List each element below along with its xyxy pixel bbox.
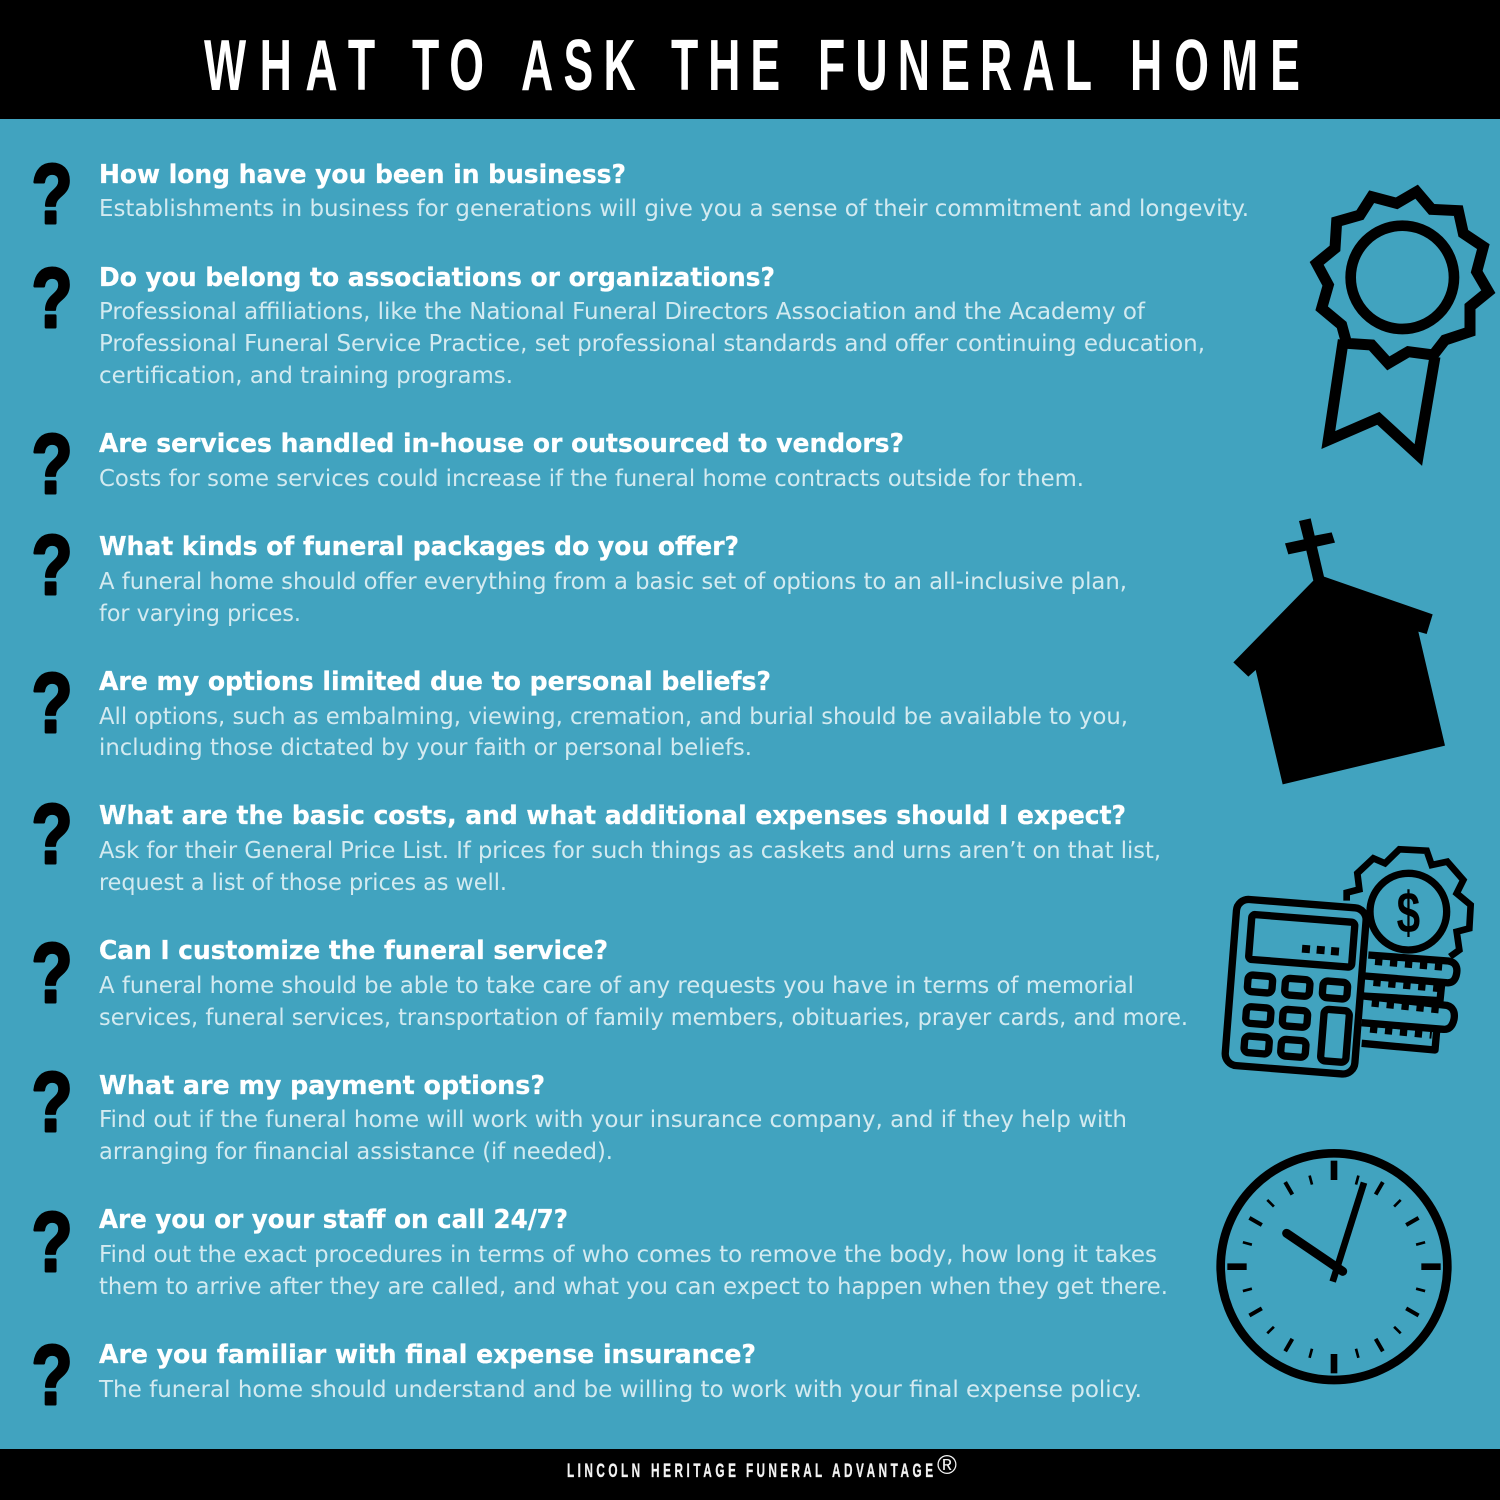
icon: funeral home chapel (1233, 518, 1445, 784)
question 6: request a list of those prices as well. (99, 870, 507, 896)
question 9: ? (31, 1196, 73, 1290)
coin (1370, 873, 1447, 950)
question 4 (31, 519, 1127, 627)
question 7: ? (31, 927, 73, 1021)
question 6: Ask for their General Price List. If prices for such things as caskets and urns aren’t on that list, (99, 838, 1161, 864)
question 8: What are my payment options? (99, 1071, 545, 1101)
question 4: A funeral home should offer everything from a basic set of options to an all-inclusive plan, (99, 569, 1127, 595)
question 9: Find out the exact procedures in terms of who comes to remove the body, how long it takes (99, 1242, 1157, 1268)
footer brand text: FUNERAL (746, 1461, 823, 1482)
question 5 (31, 657, 1128, 761)
title: FUNERAL (818, 25, 1092, 106)
question 2: Professional Funeral Service Practice, set professional standards and offer continuing education, (99, 331, 1205, 357)
footer brand text (567, 1461, 933, 1482)
question 9: them to arrive after they are called, and what you can expect to happen when they get there. (99, 1274, 1168, 1300)
question 10: The funeral home should understand and be willing to work with your final expense policy. (98, 1377, 1142, 1403)
coin: $ (1397, 880, 1420, 945)
question 1 (31, 148, 1249, 242)
question 3 (31, 418, 1084, 512)
question 1: How long have you been in business? (99, 160, 626, 190)
question 5: including those dictated by your faith or personal beliefs. (99, 735, 752, 761)
question 1: Establishments in business for generations will give you a sense of their commitment and longevity. (99, 196, 1249, 222)
footer brand text: LINCOLN (567, 1461, 640, 1482)
question 4: ? (31, 519, 73, 613)
question 7: Can I customize the funeral service? (99, 936, 608, 966)
question 6: ? (31, 788, 73, 882)
question 7: services, funeral services, transportation of family members, obituaries, prayer cards, and more. (99, 1005, 1188, 1031)
header bar (0, 0, 1500, 119)
calculator body (1224, 899, 1367, 1075)
title (204, 25, 1300, 106)
question 3: ? (31, 418, 73, 512)
question 2: Do you belong to associations or organizations? (99, 263, 775, 293)
question 2: Professional affiliations, like the National Funeral Directors Association and the Academy of (99, 299, 1146, 325)
question 10 (31, 1329, 1142, 1423)
question 3: Are services handled in-house or outsourced to vendors? (99, 429, 904, 459)
title: THE (671, 25, 780, 106)
title: HOME (1130, 25, 1300, 106)
question 5: ? (31, 657, 73, 751)
question 9: Are you or your staff on call 24/7? (99, 1205, 568, 1235)
footer brand text: ADVANTAGE (832, 1461, 933, 1482)
question 4: for varying prices. (99, 601, 301, 627)
title: WHAT (204, 25, 375, 106)
question 3: Costs for some services could increase if the funeral home contracts outside for them. (99, 466, 1084, 492)
icon: clock (1221, 1153, 1447, 1380)
question 5: Are my options limited due to personal beliefs? (99, 667, 771, 697)
icon: calculator and coins (1224, 849, 1471, 1075)
question 4: What kinds of funeral packages do you offer? (99, 532, 739, 562)
question 8: ? (31, 1056, 73, 1150)
footer bar (0, 1449, 1500, 1500)
footer brand text: HERITAGE (651, 1461, 736, 1482)
registered mark: ® (937, 1450, 957, 1480)
title: ASK (521, 25, 636, 106)
question 10: ? (31, 1329, 73, 1423)
icon: award ribbon (1317, 192, 1488, 455)
question 7 (31, 927, 1188, 1031)
coin stack (1362, 955, 1457, 1050)
question 10: Are you familiar with final expense insurance? (99, 1340, 756, 1370)
question 6 (31, 788, 1161, 896)
question 8: arranging for financial assistance (if needed). (99, 1139, 613, 1165)
question 1: ? (31, 148, 73, 242)
question 6: What are the basic costs, and what additional expenses should I expect? (99, 801, 1126, 831)
question 7: A funeral home should be able to take care of any requests you have in terms of memorial (99, 973, 1134, 999)
question 8 (31, 1056, 1127, 1165)
question 2: ? (31, 252, 73, 346)
question 2 (31, 252, 1205, 389)
question 2: certification, and training programs. (99, 363, 513, 389)
title: TO (412, 25, 484, 106)
gear (1347, 849, 1471, 957)
question 9 (31, 1196, 1168, 1300)
question 8: Find out if the funeral home will work with your insurance company, and if they help with (99, 1107, 1127, 1133)
question 5: All options, such as embalming, viewing, cremation, and burial should be available to you, (99, 704, 1128, 730)
